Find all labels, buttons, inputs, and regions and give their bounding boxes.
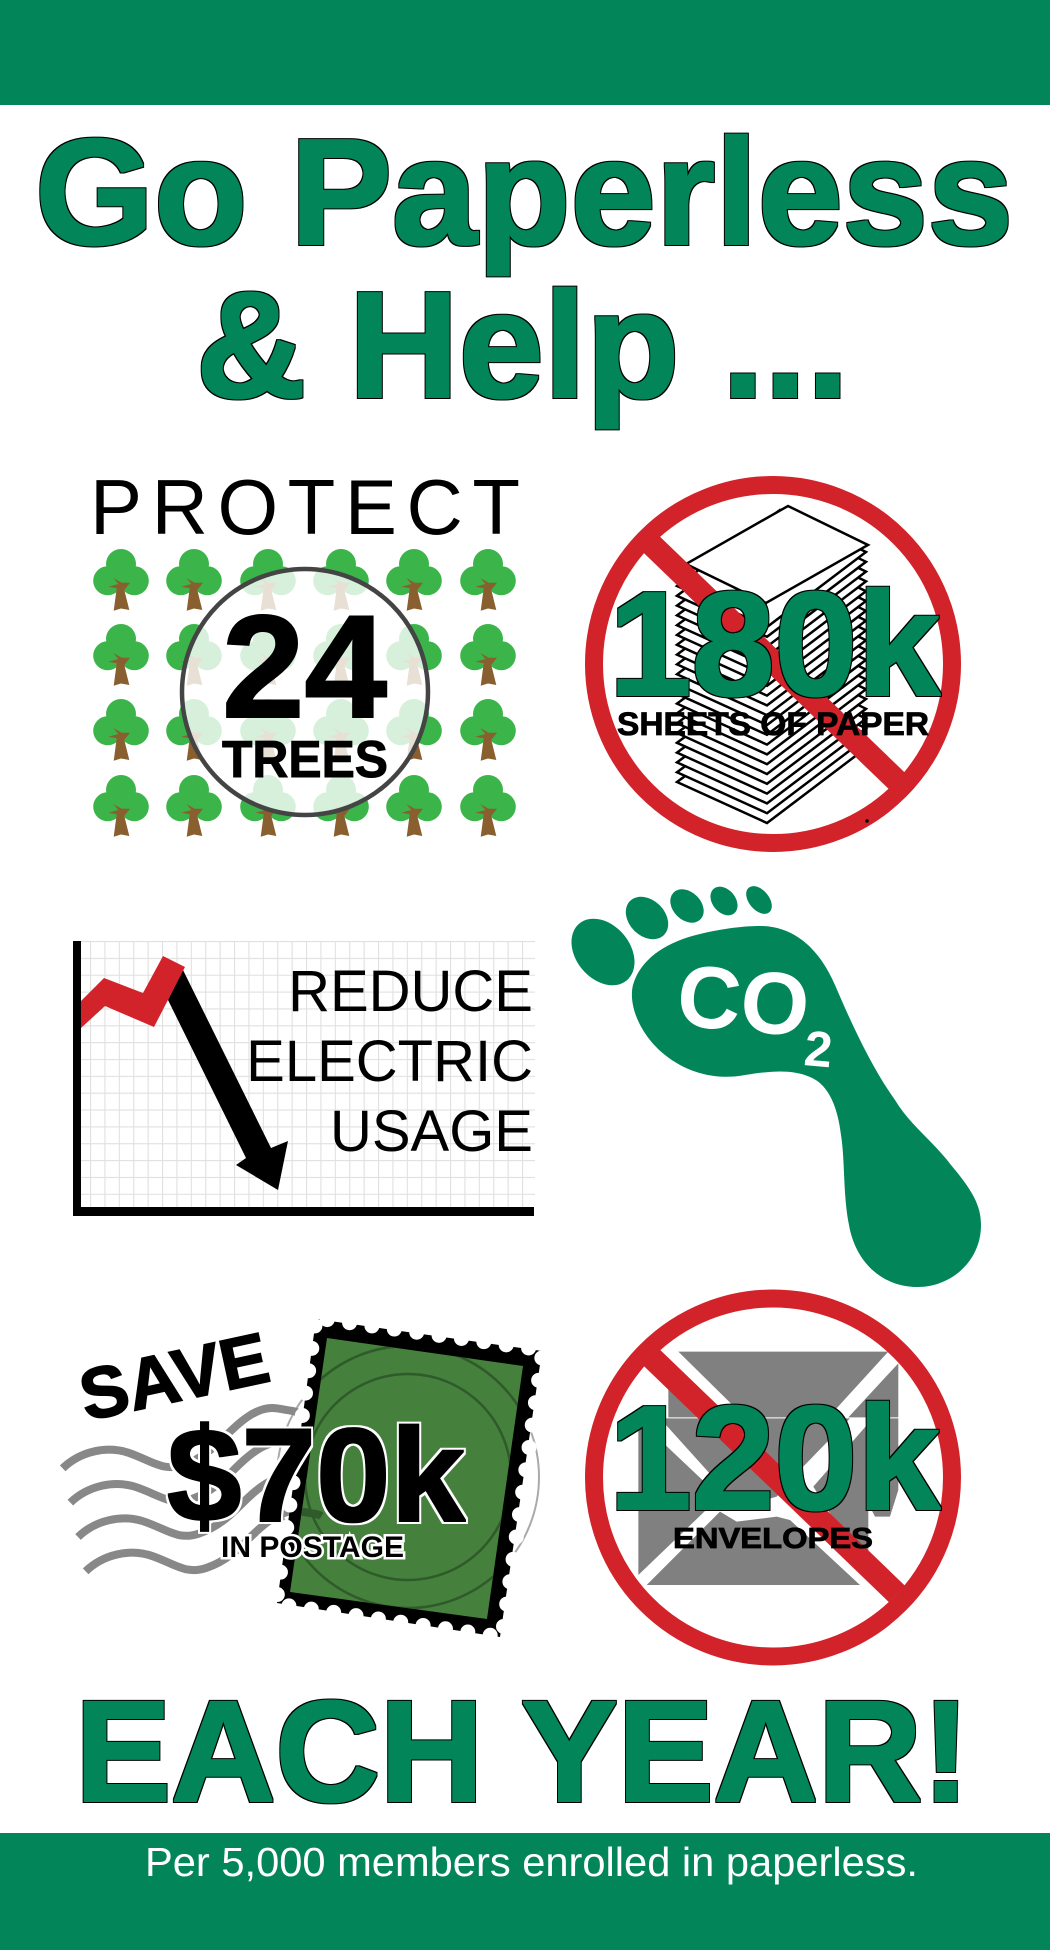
red line [81,956,185,1028]
icon: co2 footprint: CO [673,945,813,1055]
top green banner [0,0,1050,105]
text: reduce electric usage: ELECTRIC [246,1029,533,1094]
title: & Help ... [196,260,849,429]
heading: save: SAVE [72,1318,276,1437]
panel: no paper [594,485,952,843]
postmark waves [63,1408,321,1571]
footnote: Per 5,000 members enrolled in paperless. [145,1839,918,1885]
label: in postage: IN POSTAGE [221,1531,404,1564]
icon: co2 footprint [559,881,981,1287]
title [35,107,1013,429]
bottom green banner [0,1833,1050,1950]
panel: reduce electric usage [73,941,535,1216]
label: trees: TREES [222,731,388,789]
chart grid [81,941,535,1207]
heading: protect: PROTECT [90,463,520,551]
chart axes [73,941,534,1216]
tree grid icon [93,549,516,837]
icon: down arrow [168,970,288,1190]
number: 120k: 120k [609,1376,941,1541]
postmark circle [277,1346,539,1608]
number: 24 trees: 24 [222,585,387,748]
text: reduce electric usage: USAGE [330,1099,533,1164]
icon: co2 footprint: 2 [802,1020,835,1078]
panel: protect trees [90,463,520,837]
icon: envelope [638,1352,898,1585]
label: envelopes: ENVELOPES [673,1523,873,1555]
label: sheets of paper: SHEETS OF PAPER [617,706,929,742]
panel: save postage [63,1318,543,1637]
text: reduce electric usage [246,959,533,1164]
icon: prohibition sign [594,1298,952,1656]
number: $70k: $70k [167,1402,466,1550]
icon: prohibition sign [594,485,952,843]
number: 180k: 180k [609,562,941,727]
icon: paper stack [677,506,868,823]
text: reduce electric usage: REDUCE [288,959,533,1024]
translucent circle [182,569,428,815]
closing heading: EACH YEAR! [75,1671,970,1832]
title: Go Paperless [35,107,1013,276]
panel: no envelopes [594,1298,952,1656]
icon: stamp [277,1319,541,1637]
